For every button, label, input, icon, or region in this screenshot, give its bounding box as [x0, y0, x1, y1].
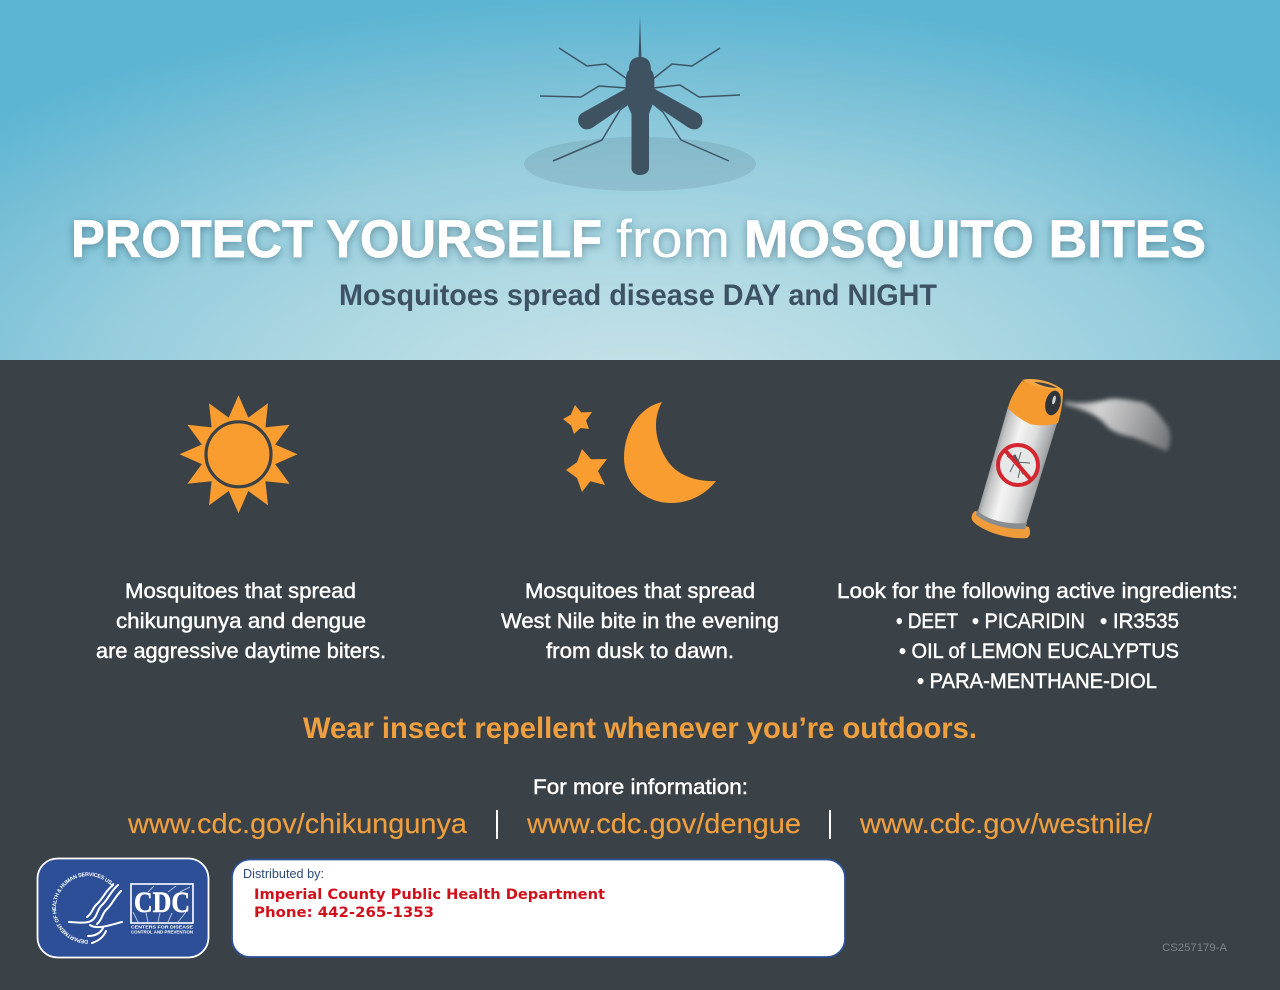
text block: active ingredients: • PICARIDIN — [972, 609, 1085, 633]
spray cloud — [1065, 399, 1170, 451]
text block: active ingredients: • IR3535 — [1100, 609, 1179, 633]
title — [71, 210, 1206, 269]
panel: distributed by — [232, 860, 845, 957]
text block: daytime biters: Mosquitoes that spread — [125, 579, 356, 603]
text block: West Nile: Mosquitoes that spread — [525, 579, 755, 603]
CDC mark: CENTERS FOR DISEASE — [131, 924, 193, 930]
links: www.cdc.gov/westnile/ — [859, 808, 1152, 839]
icon: repellent spray can — [972, 379, 1170, 538]
links — [127, 808, 1152, 839]
panel: distributed by: Phone: 442-265-1353 — [254, 905, 434, 921]
title: from — [616, 210, 730, 269]
text block: West Nile — [501, 579, 779, 663]
CDC mark: CDC — [134, 886, 190, 919]
no-mosquito label — [998, 445, 1038, 485]
links: www.cdc.gov/dengue — [526, 808, 801, 839]
header background — [0, 0, 1280, 360]
text block: active ingredients: • OIL of LEMON EUCALYPTUS — [899, 639, 1179, 663]
text block: West Nile: West Nile bite in the evening — [501, 609, 779, 633]
text block: daytime biters — [96, 579, 386, 663]
logo: HHS and CDC — [36, 858, 210, 958]
panel: distributed by: Distributed by: — [243, 867, 324, 881]
title: PROTECT YOURSELF — [71, 210, 602, 269]
call to action: Wear insect repellent whenever you’re outdoors. — [303, 712, 977, 745]
can body — [978, 407, 1058, 524]
CDC mark — [131, 884, 194, 934]
text block: active ingredients: Look for the following active ingredients: — [837, 579, 1238, 603]
icon: mosquito — [524, 16, 756, 191]
grey band — [976, 510, 1027, 529]
icon: sun — [180, 395, 298, 513]
dark panel background — [0, 360, 1280, 990]
base rim — [972, 511, 1030, 538]
subtitle: Mosquitoes spread disease DAY and NIGHT — [339, 279, 937, 312]
panel: distributed by: Imperial County Public Health Department — [254, 887, 605, 903]
text block: active ingredients: • DEET — [896, 609, 958, 633]
links: www.cdc.gov/chikungunya — [127, 808, 467, 839]
title: MOSQUITO BITES — [744, 210, 1206, 269]
more information label: For more information: — [533, 775, 748, 799]
icon: moon and stars — [563, 402, 716, 503]
text block: daytime biters: are aggressive daytime biters. — [96, 639, 386, 663]
text block: active ingredients — [837, 579, 1238, 693]
text block: West Nile: from dusk to dawn. — [546, 639, 734, 663]
CDC mark: CONTROL AND PREVENTION — [131, 930, 194, 934]
HHS seal: DEPARTMENT OF HEALTH & HUMAN SERVICES USA — [52, 872, 114, 944]
text block: active ingredients: • PARA-MENTHANE-DIOL — [917, 669, 1157, 693]
cap — [1008, 381, 1063, 425]
document code: CS257179-A — [1162, 942, 1228, 954]
text block: daytime biters: chikungunya and dengue — [116, 609, 366, 633]
